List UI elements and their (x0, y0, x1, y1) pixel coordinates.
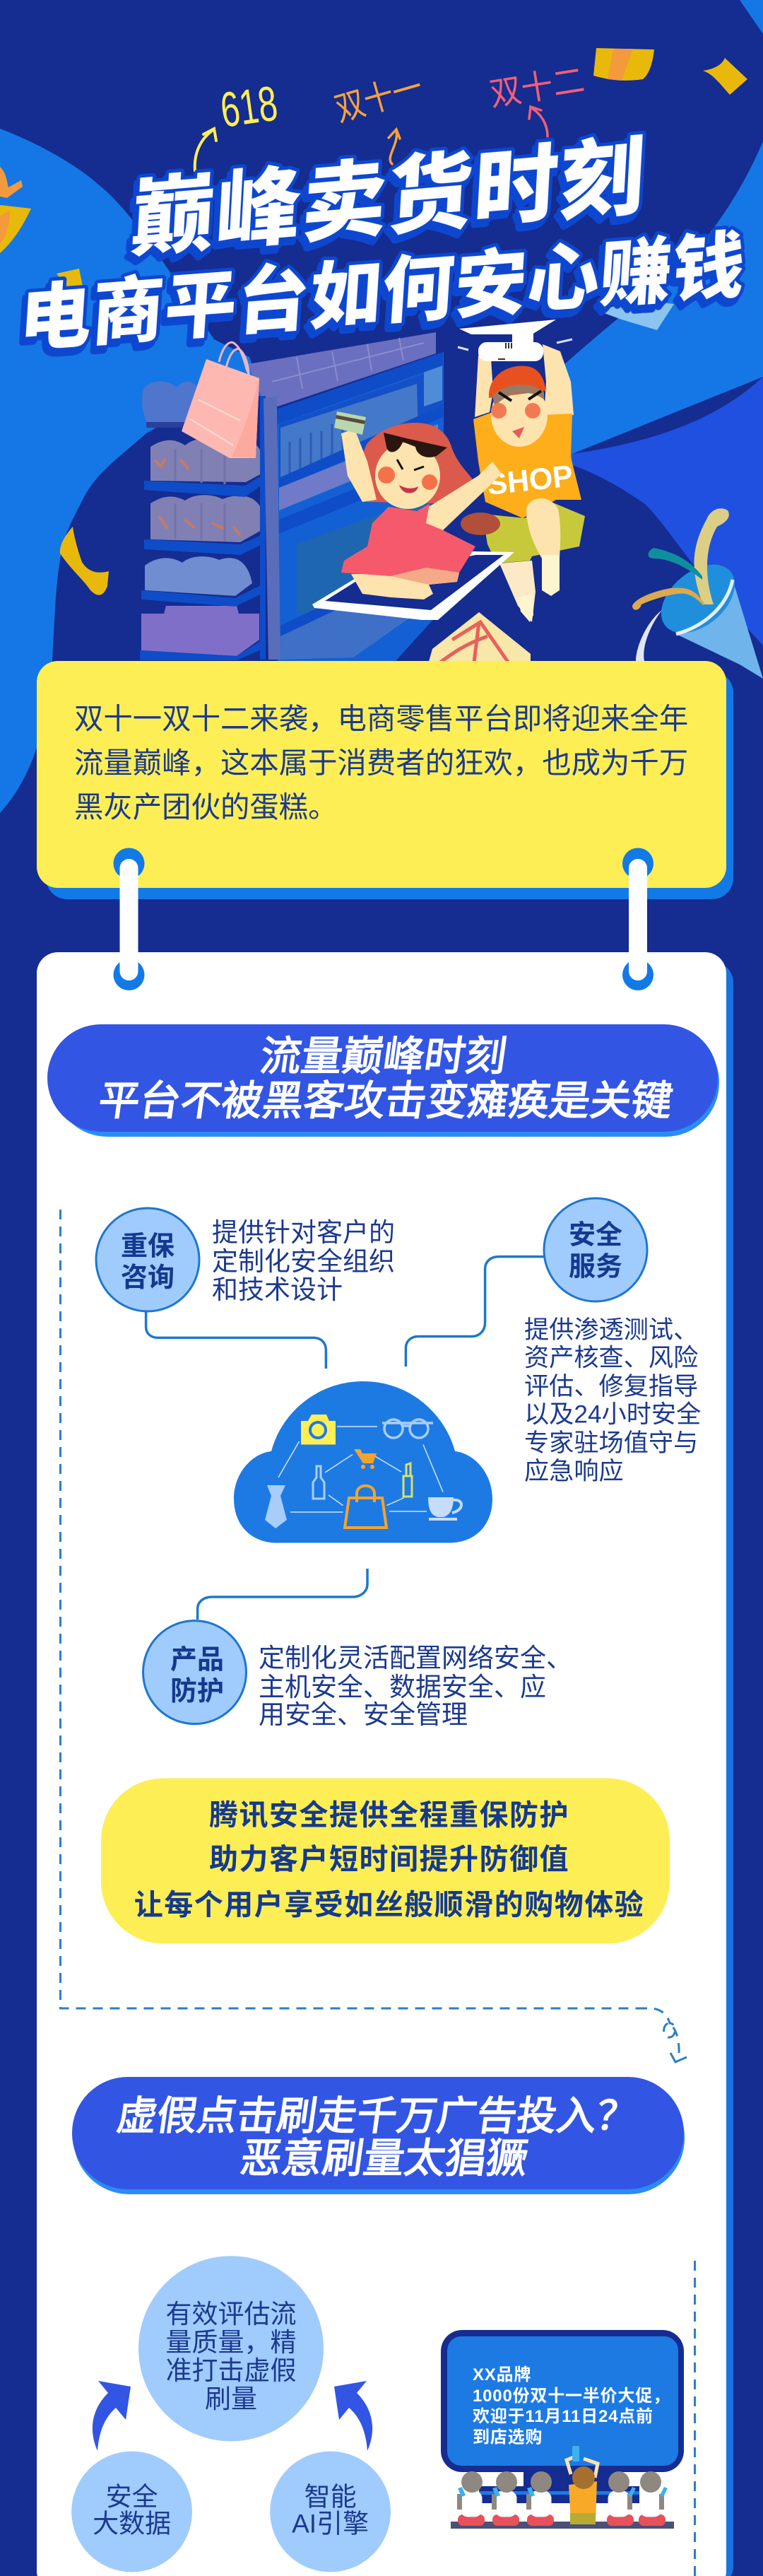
connectors (146, 1257, 544, 1620)
text: 重保咨询 description: 和技术设计 (212, 1275, 343, 1304)
bubble: 智能AI引擎: 智能 (304, 2483, 357, 2511)
title: 巅峰卖货时刻 (128, 129, 649, 268)
dashed guide right (694, 2261, 696, 2576)
icon: glasses (382, 1419, 433, 1438)
heading pill: 流量巅峰时刻 (47, 1024, 719, 1137)
SHOP shirt text: SHOP (485, 459, 574, 502)
node: 重保咨询 (96, 1208, 199, 1311)
girl character (334, 411, 502, 599)
icon: pink shopping bag (182, 342, 259, 458)
bubble: 有效评估: 准打击虚假 (165, 2356, 297, 2385)
text: 安全服务 description: 评估、修复指导 (524, 1373, 698, 1400)
arrow right (334, 2381, 372, 2451)
icon: gift box (426, 612, 531, 672)
credit card (334, 411, 366, 435)
intro text: 流量巅峰，这本属于消费者的狂欢，也成为千万 (74, 747, 688, 780)
text: 产品防护 description: 主机安全、数据安全、应 (259, 1673, 546, 1702)
tablet under girl (312, 551, 514, 620)
bubble: 安全大数据 (71, 2452, 192, 2572)
heading pill: 虚假点击: 虚假点击刷走千万广告投入？ (114, 2095, 640, 2139)
text: 重保咨询 description: 定制化安全组织 (212, 1247, 395, 1276)
panel: yellow intro card (37, 661, 733, 899)
title: 电商平台如何安心赚钱 (17, 224, 748, 361)
icon: coffee cup (428, 1497, 461, 1521)
node: 安全服务: 服务 (569, 1252, 622, 1282)
intro text: 黑灰产团伙的蛋糕。 (74, 791, 338, 824)
handwritten label: 618 (195, 76, 280, 171)
callout: yellow summary pill: 助力客户短时间提升防御值 (209, 1843, 569, 1875)
icon: orange handbag (345, 1486, 386, 1528)
bubble: 安全大数据: 安全 (106, 2483, 158, 2511)
icon: lipstick (403, 1463, 412, 1497)
bubble: 有效评估: 有效评估流 (165, 2300, 297, 2329)
node: 安全服务 (544, 1198, 647, 1301)
callout: yellow summary pill (101, 1779, 670, 1944)
billboard text: 欢迎于11月11日24点前 (473, 2407, 653, 2426)
bubble: 智能AI引擎 (270, 2452, 391, 2572)
heading pill: 流量巅峰时刻: 平台不被黑客攻击变瘫痪是关键 (95, 1078, 675, 1124)
cloud with product icons (234, 1381, 492, 1542)
heading pill: 流量巅峰时刻: 流量巅峰时刻 (257, 1034, 509, 1079)
arrow left (93, 2381, 131, 2451)
heading pill: 虚假点击 (72, 2077, 685, 2194)
node: 产品防护: 产品 (170, 1645, 224, 1675)
text: 安全服务 description: 应急响应 (524, 1458, 624, 1485)
panel: white content sheet (37, 952, 733, 2576)
icon: tie (265, 1485, 287, 1528)
text: 安全服务 description: 以及24小时安全 (524, 1401, 701, 1429)
text: 重保咨询 description: 提供针对客户的 (212, 1218, 395, 1247)
intro text: 双十一双十二来袭，电商零售平台即将迎来全年 (74, 703, 688, 735)
node: 产品防护 (143, 1621, 246, 1724)
icon: shopping cart (354, 1449, 377, 1469)
icon: party cone with streamers (632, 508, 763, 679)
handwritten label: 双十二 (487, 61, 587, 136)
billboard text: 到店选购 (473, 2428, 543, 2447)
bubble: 有效评估 (138, 2256, 324, 2441)
callout: yellow summary pill: 腾讯安全提供全程重保防护 (209, 1798, 569, 1831)
text: 安全服务 description: 专家驻场值守与 (524, 1429, 698, 1457)
header background shapes (0, 0, 763, 813)
boy character (458, 320, 585, 622)
text: 产品防护 description: 定制化灵活配置网络安全、 (259, 1644, 572, 1673)
text: 安全服务 description: 提供渗透测试、 (524, 1316, 698, 1344)
icon: bottle (313, 1466, 324, 1499)
drone (458, 320, 572, 361)
handwritten label: 双十一: 双十一 (331, 67, 427, 129)
text: 产品防护 description: 用安全、安全管理 (259, 1700, 468, 1729)
node: 安全服务: 安全 (569, 1221, 622, 1251)
bubble: 有效评估: 量质量，精 (165, 2328, 297, 2357)
text: 安全服务 description: 资产核查、风险 (524, 1345, 698, 1371)
billboard illustration (441, 2330, 684, 2529)
bubble: 智能AI引擎: AI引擎 (292, 2510, 369, 2539)
handwritten label: 双十二: 双十二 (487, 61, 587, 113)
handwritten label: 双十一 (331, 67, 427, 164)
node: 产品防护: 防护 (170, 1677, 224, 1706)
callout: yellow summary pill: 让每个用户享受如丝般顺滑的购物体验 (134, 1889, 644, 1921)
billboard text: 1000份双十一半价大促， (473, 2387, 670, 2406)
handwritten label: 618: 618 (217, 76, 280, 138)
hanging straps (113, 859, 653, 990)
title (17, 129, 748, 361)
bubble: 安全大数据: 大数据 (93, 2510, 171, 2539)
node: 重保咨询: 重保 (121, 1232, 175, 1262)
confetti pieces (0, 48, 747, 595)
icon: camera (301, 1415, 336, 1445)
heading pill: 虚假点击: 恶意刷量太猖獗 (237, 2136, 531, 2182)
shelf illustration (140, 332, 452, 661)
node: 重保咨询: 咨询 (121, 1263, 175, 1293)
dashed guide with arrow (61, 1210, 687, 2062)
bubble: 有效评估: 刷量 (205, 2384, 257, 2413)
audience (457, 2446, 668, 2526)
billboard text: XX品牌 (473, 2365, 531, 2384)
